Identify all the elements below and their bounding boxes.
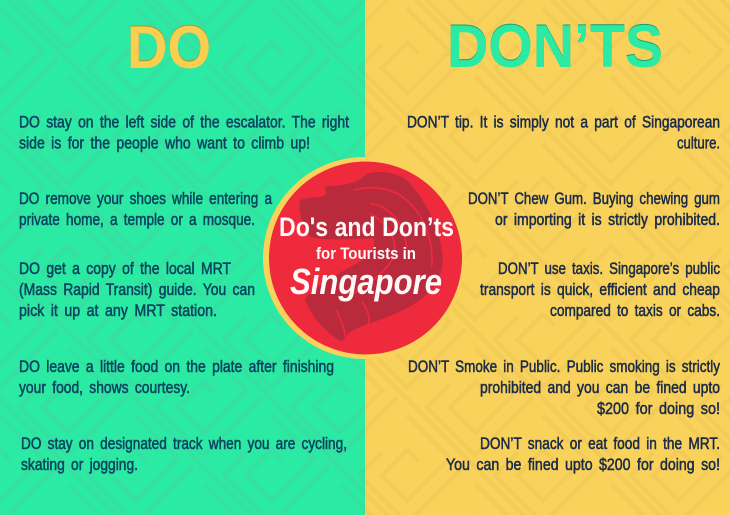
badge title: Do's and Don’ts bbox=[279, 212, 454, 242]
badge title: Singapore bbox=[290, 261, 442, 302]
do: escalator: DO stay on the left side of the escalator. The right bbox=[19, 112, 349, 132]
heading: DO: DO bbox=[127, 13, 211, 80]
heading: DON'TS: DON’TS bbox=[447, 12, 663, 79]
do: shoes bbox=[19, 189, 272, 229]
do: MRT guide: DO get a copy of the local MRT bbox=[19, 259, 231, 278]
do: designated track bbox=[21, 434, 347, 474]
badge title bbox=[279, 212, 454, 302]
don't: chew gum bbox=[468, 189, 720, 229]
do: shoes: DO remove your shoes while entering a bbox=[19, 189, 272, 208]
do: designated track: skating or jogging. bbox=[21, 455, 138, 474]
center badge bbox=[263, 157, 465, 359]
don't: smoke bbox=[408, 357, 720, 418]
don't: snack bbox=[446, 434, 720, 474]
heading: DO: DO bbox=[127, 14, 211, 81]
do: designated track: DO stay on designated track when you are cycling, bbox=[21, 434, 347, 453]
do: leave food: your food, shows courtesy. bbox=[19, 378, 190, 397]
icon: merlion head bbox=[300, 172, 443, 342]
badge disc bbox=[269, 162, 462, 354]
don't: taxis bbox=[480, 259, 720, 320]
badge title: for Tourists in bbox=[316, 244, 416, 263]
do: escalator: side is for the people who want to climb up! bbox=[19, 134, 310, 152]
do: MRT guide bbox=[19, 259, 255, 320]
do: shoes: private home, a temple or a mosque. bbox=[19, 210, 255, 229]
do: MRT guide: (Mass Rapid Transit) guide. You can bbox=[19, 280, 255, 299]
do: leave food bbox=[19, 357, 334, 397]
do list bbox=[19, 112, 349, 474]
do: MRT guide: pick it up at any MRT station. bbox=[19, 301, 217, 320]
panel: don'ts background bbox=[365, 0, 730, 515]
panel: do background bbox=[0, 0, 365, 515]
don't: tip bbox=[407, 112, 720, 152]
don't list bbox=[407, 112, 720, 474]
heading: DON'TS: DON’TS bbox=[447, 13, 663, 80]
do: leave food: DO leave a little food on the plate after finishing bbox=[19, 357, 334, 376]
do: escalator bbox=[19, 112, 349, 152]
badge ring bbox=[263, 157, 465, 359]
